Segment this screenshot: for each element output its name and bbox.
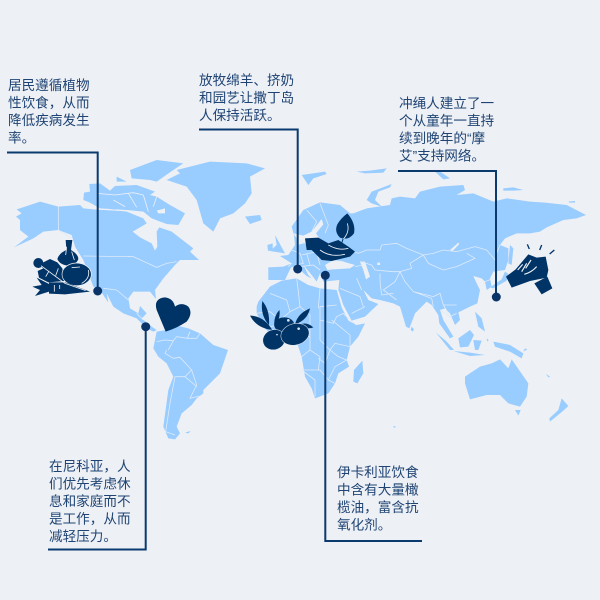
text: 性饮食，从而 [8,94,90,110]
Old World land [257,168,586,428]
icon: heart [156,297,190,332]
icon: raised fist [506,244,554,294]
Tasmania and New Zealand [393,374,568,428]
text: 艾”支持网络。 [399,148,485,164]
Sakhalin and Japan [490,245,513,288]
text: 榄油，富含抗 [337,499,419,515]
text: 在尼科亚，人 [49,459,131,474]
Eurasia [268,185,586,338]
icon: olive branch [250,301,313,353]
British Isles [267,235,285,253]
Arctic islands [302,168,575,207]
text: 中含有大量橄 [337,482,419,498]
text: 是工作，从而 [49,512,131,526]
callout 4: Nicoya [48,322,150,550]
Iceland [245,215,262,224]
leader line [325,275,422,541]
dot [93,286,102,296]
Australia [465,359,528,407]
North America [14,202,199,332]
Black Sea [325,260,355,270]
callout 5: Ikaria [321,271,422,541]
callout 2: Sardinia [199,73,302,274]
Aral and Baikal [377,243,459,265]
callout 1: plant-based diet [7,77,102,296]
Arctic channels [85,193,157,217]
text: 冲绳人建立了一 [399,96,495,111]
text: 居民遵循植物 [8,77,90,93]
South America [153,325,228,439]
text: 人保持活跃。 [199,108,281,123]
Old World [257,168,586,428]
text: 放牧绵羊、挤奶 [199,73,294,88]
leader line [199,130,298,269]
Old World borders [257,203,500,397]
text: 续到晚年的“摩 [399,130,485,146]
text: 个从童年一直持 [399,112,495,128]
callout 3: Okinawa [398,96,501,302]
leader line [7,152,98,291]
text: 息和家庭而不 [49,493,131,509]
Greenland [167,162,265,232]
icon: vegetables [32,240,91,296]
Africa [257,278,365,398]
text: 率。 [8,130,35,146]
text: 伊卡利亚饮食 [337,464,419,480]
Americas borders [58,207,200,435]
Hudson Bay island [157,208,165,213]
text: 们优先考虑休 [49,476,131,492]
Southeast Asian islands [411,312,527,358]
leader line [48,327,146,550]
dot [141,322,150,331]
Americas [14,160,265,439]
text [399,96,495,164]
text: 减轻压力。 [49,529,117,544]
text [8,77,90,146]
dot [321,271,330,280]
text: 和园艺让撒丁岛 [199,90,294,106]
world map [14,160,586,439]
Madagascar [353,361,363,383]
text: 降低疾病发生 [8,113,90,128]
text [337,464,419,532]
Americas land [14,160,265,439]
Arctic islands [83,160,185,225]
icon: hand holding plant [305,213,355,261]
inland seas [293,219,459,279]
dot [492,292,501,302]
Baltic Sea [293,219,323,245]
leader line [398,171,496,297]
text [199,73,294,123]
dot [293,264,302,274]
text [49,459,131,544]
Caspian Sea [360,262,370,279]
text: 氧化剂。 [337,518,391,532]
